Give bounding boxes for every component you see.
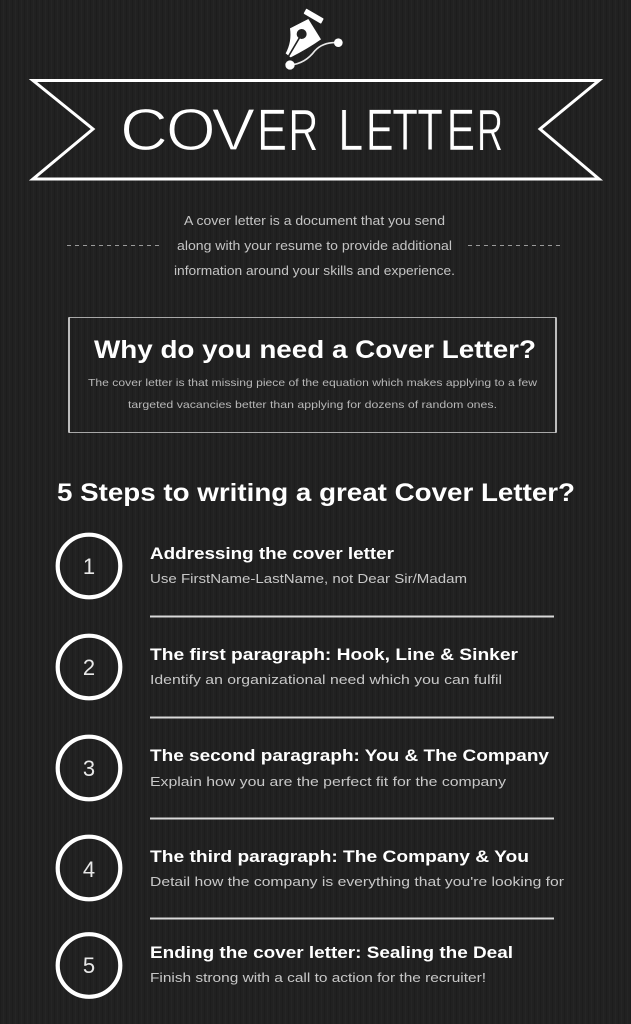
step 5 (58, 934, 513, 997)
panel body text (88, 377, 537, 411)
dashed divider right (468, 244, 561, 246)
title: E (257, 98, 287, 163)
step 2 (58, 636, 518, 698)
title: E (447, 98, 475, 163)
step 4: Detail how the company is everything that you're looking for (150, 874, 565, 889)
divider (150, 818, 554, 820)
intro text: A cover letter is a document that you send (184, 214, 445, 228)
step 1: Use FirstName-LastName, not Dear Sir/Madam (150, 571, 467, 586)
title: R (477, 98, 503, 163)
intro text (174, 214, 455, 278)
title: O (166, 97, 216, 163)
step 5: Ending the cover letter: Sealing the Deal (150, 943, 513, 962)
intro text: along with your resume to provide additional (177, 239, 452, 253)
intro text: information around your skills and experience. (174, 264, 455, 278)
title: L (338, 98, 363, 163)
step 4: 4 (83, 857, 95, 882)
panel body text: The cover letter is that missing piece of the equation which makes applying to a few (88, 377, 537, 389)
step 3 (58, 737, 550, 799)
step 1: Addressing the cover letter (150, 544, 394, 563)
title: C (120, 97, 168, 163)
step 4 (58, 837, 565, 899)
divider (150, 716, 554, 718)
steps heading: 5 Steps to writing a great Cover Letter? (57, 479, 575, 507)
title banner (33, 80, 599, 179)
step 2: The first paragraph: Hook, Line & Sinker (150, 645, 518, 664)
step 2: 2 (83, 655, 95, 680)
step 2: Identify an organizational need which you can fulfil (150, 672, 502, 687)
divider (150, 918, 554, 920)
divider (150, 616, 554, 618)
title: T (392, 98, 418, 163)
panel: why you need a cover letter (69, 318, 556, 432)
step 5: Finish strong with a call to action for the recruiter! (150, 970, 486, 985)
title: T (417, 98, 443, 163)
step 1: 1 (83, 554, 95, 579)
title: V (212, 97, 256, 163)
step 4: The third paragraph: The Company & You (150, 847, 529, 866)
icon: fountain pen nib with bezier curve (285, 10, 343, 70)
step 5: 5 (83, 953, 95, 978)
step 3: Explain how you are the perfect fit for the company (150, 774, 507, 789)
step 3: The second paragraph: You & The Company (150, 746, 550, 765)
title: R (288, 98, 318, 163)
panel heading: Why do you need a Cover Letter? (94, 336, 536, 364)
title: E (366, 98, 394, 163)
panel body text: targeted vacancies better than applying for dozens of random ones. (128, 399, 497, 411)
dashed divider left (67, 244, 160, 246)
step 3: 3 (83, 756, 95, 781)
step 1 (58, 535, 467, 597)
